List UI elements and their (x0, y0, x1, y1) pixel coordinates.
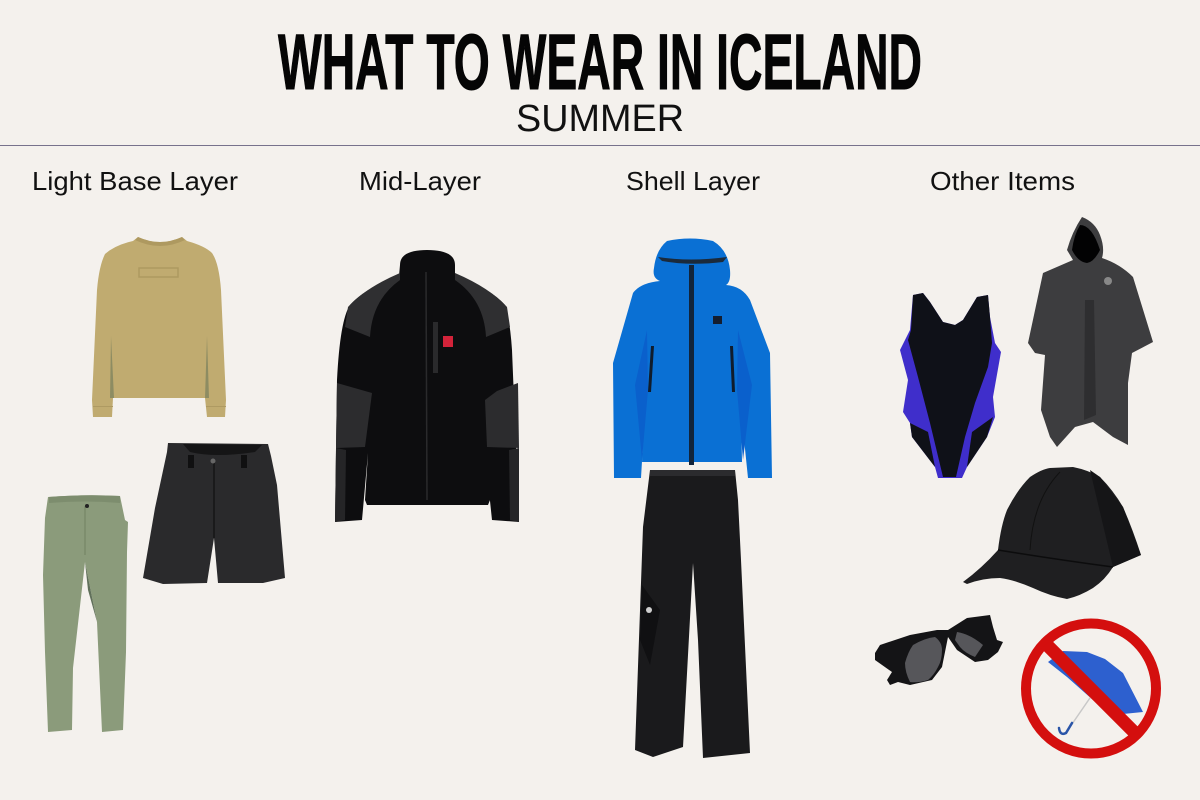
icon: tan long-sleeve sweater (92, 237, 226, 417)
icon: rain poncho (1028, 217, 1153, 447)
heading: other items: Other Items (930, 166, 1075, 196)
icon: swimsuit (900, 293, 1001, 478)
heading: light base layer: Light Base Layer (32, 166, 238, 196)
icon: blue umbrella (1048, 651, 1143, 734)
icon: sunglasses (875, 615, 1003, 685)
heading: shell layer: Shell Layer (626, 166, 760, 196)
heading: mid-layer: Mid-Layer (359, 166, 481, 196)
subtitle: SUMMER (516, 98, 684, 140)
icon: blue shell jacket with hood (613, 238, 772, 478)
icon: green trousers (43, 495, 128, 732)
icon: black shell trousers (635, 470, 750, 758)
icon: dark shorts (143, 443, 285, 584)
icon: black fleece mid-layer jacket (335, 250, 519, 522)
icon: black baseball cap (963, 467, 1141, 599)
icon: no umbrella sign (1026, 624, 1156, 754)
